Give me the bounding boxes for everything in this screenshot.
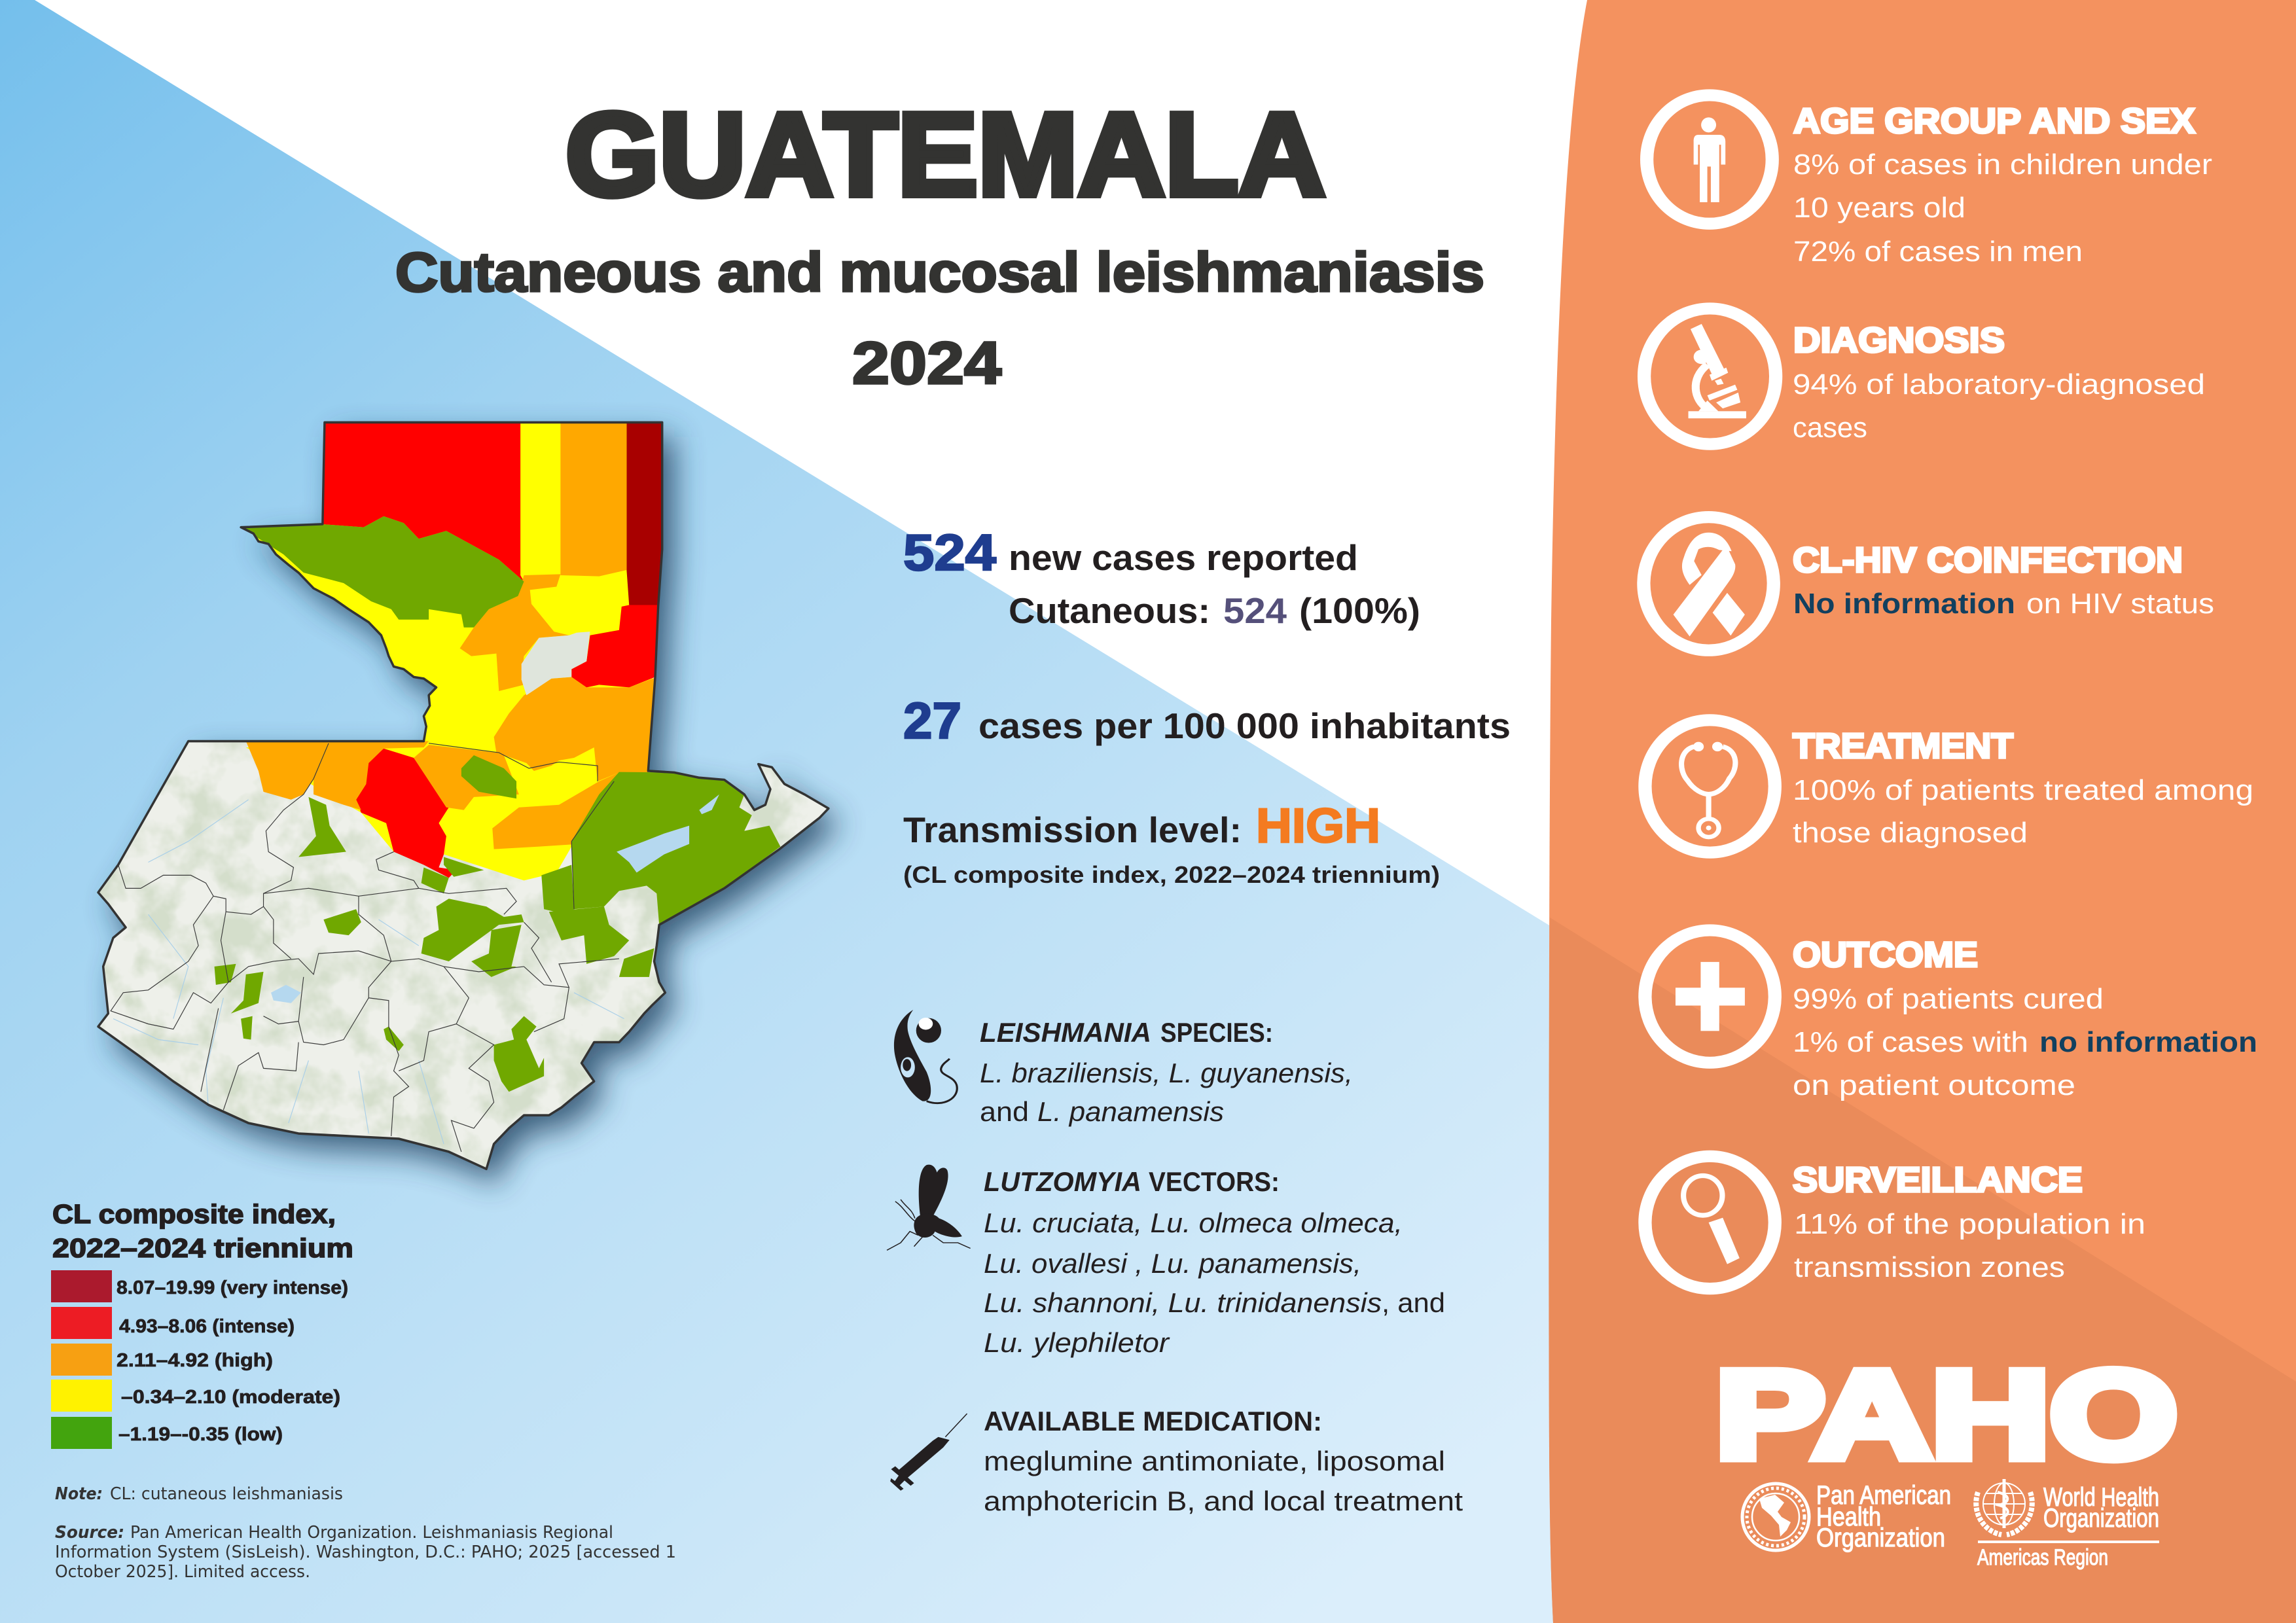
- icon: ribbon: [1643, 517, 1774, 651]
- text: age group and sex: 72% of cases in men: [1793, 236, 2083, 268]
- stat: incidence: [903, 692, 1511, 749]
- text: World Health Organization: Americas Region: [1977, 1545, 2108, 1570]
- text: CL-HIV coinfection: [1793, 541, 2214, 620]
- text: diagnosis: cases: [1793, 412, 1867, 444]
- text: diagnosis: [1793, 321, 2205, 444]
- text: surveillance: [1793, 1160, 2145, 1283]
- text: treatment: TREATMENT: [1793, 726, 2013, 766]
- text: lutzomyia vectors: , and: [1382, 1287, 1445, 1318]
- text: outcome: no information: [2039, 1026, 2257, 1058]
- text: treatment: [1793, 726, 2253, 849]
- text: surveillance: SURVEILLANCE: [1793, 1160, 2083, 1200]
- text: leishmania species: [980, 1017, 1353, 1127]
- text: lutzomyia vectors: Lu. ylephiletor: [984, 1327, 1170, 1358]
- stat: transmission level: HIGH: [1256, 798, 1380, 853]
- text: World Health Organization: World Health: [2043, 1483, 2159, 1512]
- text: age group and sex: 8% of cases in children under: [1793, 149, 2212, 181]
- grey unclassified patch: [522, 632, 590, 695]
- icon: magnifier: [1645, 1156, 1775, 1289]
- note: CL: cutaneous leishmaniasis: [110, 1484, 343, 1504]
- stat: new cases: [903, 524, 1420, 631]
- text: treatment: those diagnosed: [1793, 817, 2028, 849]
- icon: plus: [1645, 930, 1775, 1063]
- logo: PAHO wordmark: PAHO: [1715, 1346, 2178, 1484]
- note: Note:: [55, 1484, 103, 1504]
- text: CL-HIV coinfection: No information: [1793, 588, 2015, 620]
- stat: transmission level: Transmission level:: [903, 810, 1242, 850]
- text: Pan American Health Organization: Health: [1816, 1503, 1881, 1531]
- source: [55, 1523, 676, 1582]
- legend: –0.34–2.10 (moderate): [121, 1387, 340, 1408]
- text: outcome: 99% of patients cured: [1793, 983, 2104, 1015]
- logo: PAHO seal: [1742, 1484, 1809, 1550]
- legend: –1.19–-0.35 (low): [118, 1424, 283, 1445]
- source: October 2025]. Limited access.: [55, 1562, 310, 1582]
- stat: transmission level: (CL composite index, 2022–2024 triennium): [903, 861, 1440, 888]
- text: surveillance: 11% of the population in: [1794, 1208, 2145, 1240]
- text: leishmania species: SPECIES:: [1160, 1017, 1273, 1048]
- text: lutzomyia vectors: Lu. cruciata, Lu. olmeca olmeca,: [984, 1207, 1403, 1238]
- logo: WHO emblem: [1976, 1479, 2032, 1535]
- text: World Health Organization: Organization: [2043, 1504, 2159, 1533]
- year: 2024: [852, 330, 1001, 397]
- text: CL-HIV coinfection: on HIV status: [2026, 588, 2214, 620]
- text: available medication: [984, 1406, 1463, 1516]
- title: GUATEMALA: [565, 89, 1325, 221]
- subtitle: Cutaneous and mucosal leishmaniasis: [395, 241, 1484, 303]
- text: available medication: meglumine antimoniate, liposomal: [984, 1446, 1445, 1476]
- text: World Health Organization: [1977, 1483, 2159, 1570]
- text: available medication: amphotericin B, and local treatment: [984, 1486, 1463, 1516]
- stat: new cases: 524: [903, 524, 996, 581]
- legend: 8.07–19.99 (very intense): [117, 1277, 348, 1298]
- icon: microscope: [1644, 308, 1776, 444]
- text: lutzomyia vectors: [984, 1166, 1445, 1358]
- text: age group and sex: AGE GROUP AND SEX: [1793, 101, 2195, 141]
- text: outcome: 1% of cases with: [1793, 1026, 2028, 1058]
- legend: CL composite index,: [52, 1199, 336, 1229]
- text: available medication: AVAILABLE MEDICATION:: [984, 1406, 1322, 1436]
- source: Information System (SisLeish). Washington, D.C.: PAHO; 2025 [accessed 1: [55, 1543, 676, 1562]
- text: CL-HIV coinfection: CL-HIV COINFECTION: [1793, 541, 2183, 580]
- source: Source:: [55, 1523, 124, 1543]
- text: lutzomyia vectors: VECTORS:: [1149, 1166, 1280, 1197]
- stat: new cases: (100%): [1299, 590, 1420, 631]
- stat: new cases: Cutaneous:: [1009, 590, 1210, 631]
- text: leishmania species: L. braziliensis, L. guyanensis,: [980, 1058, 1353, 1088]
- stat: incidence: cases per 100 000 inhabitants: [978, 705, 1511, 746]
- source: Pan American Health Organization. Leishmaniasis Regional: [130, 1523, 613, 1543]
- text: leishmania species: LEISHMANIA: [980, 1017, 1151, 1048]
- text: outcome: OUTCOME: [1793, 935, 1978, 974]
- stat: incidence: 27: [903, 692, 961, 749]
- text: age group and sex: 10 years old: [1793, 192, 1965, 224]
- icon: sand fly: [887, 1165, 971, 1250]
- icon: stethoscope: [1645, 720, 1775, 853]
- text: lutzomyia vectors: LUTZOMYIA: [984, 1166, 1141, 1197]
- text: outcome: on patient outcome: [1793, 1069, 2075, 1101]
- text: age group and sex: [1793, 101, 2212, 268]
- icon: syringe: [890, 1414, 967, 1491]
- text: outcome: [1793, 935, 2257, 1101]
- text: Pan American Health Organization: Pan American: [1816, 1481, 1951, 1510]
- stat: new cases: 524: [1223, 590, 1287, 631]
- text: leishmania species: L. panamensis: [1037, 1096, 1224, 1127]
- text: diagnosis: 94% of laboratory-diagnosed: [1793, 368, 2205, 401]
- legend: 2.11–4.92 (high): [117, 1350, 273, 1371]
- text: leishmania species: and: [980, 1096, 1029, 1127]
- legend: 4.93–8.06 (intense): [119, 1316, 295, 1337]
- text: surveillance: transmission zones: [1794, 1251, 2065, 1283]
- text: lutzomyia vectors: Lu. ovallesi , Lu. panamensis,: [984, 1248, 1361, 1279]
- text: diagnosis: DIAGNOSIS: [1793, 321, 2005, 360]
- map: Guatemala departments by CL composite index: [98, 419, 840, 1184]
- icon: leishmania parasite: [894, 1010, 957, 1103]
- text: lutzomyia vectors: Lu. shannoni, Lu. trinidanensis: [984, 1287, 1382, 1318]
- panel: orange sidebar: [1549, 0, 2296, 1623]
- stat: transmission level: [903, 798, 1440, 888]
- text: treatment: 100% of patients treated among: [1793, 774, 2253, 806]
- text: Pan American Health Organization: [1816, 1481, 1951, 1552]
- text: Pan American Health Organization: Organization: [1816, 1524, 1945, 1552]
- stat: new cases: new cases reported: [1009, 537, 1358, 578]
- icon: person: [1647, 95, 1772, 224]
- legend: [51, 1199, 353, 1449]
- legend: 2022–2024 triennium: [52, 1233, 353, 1263]
